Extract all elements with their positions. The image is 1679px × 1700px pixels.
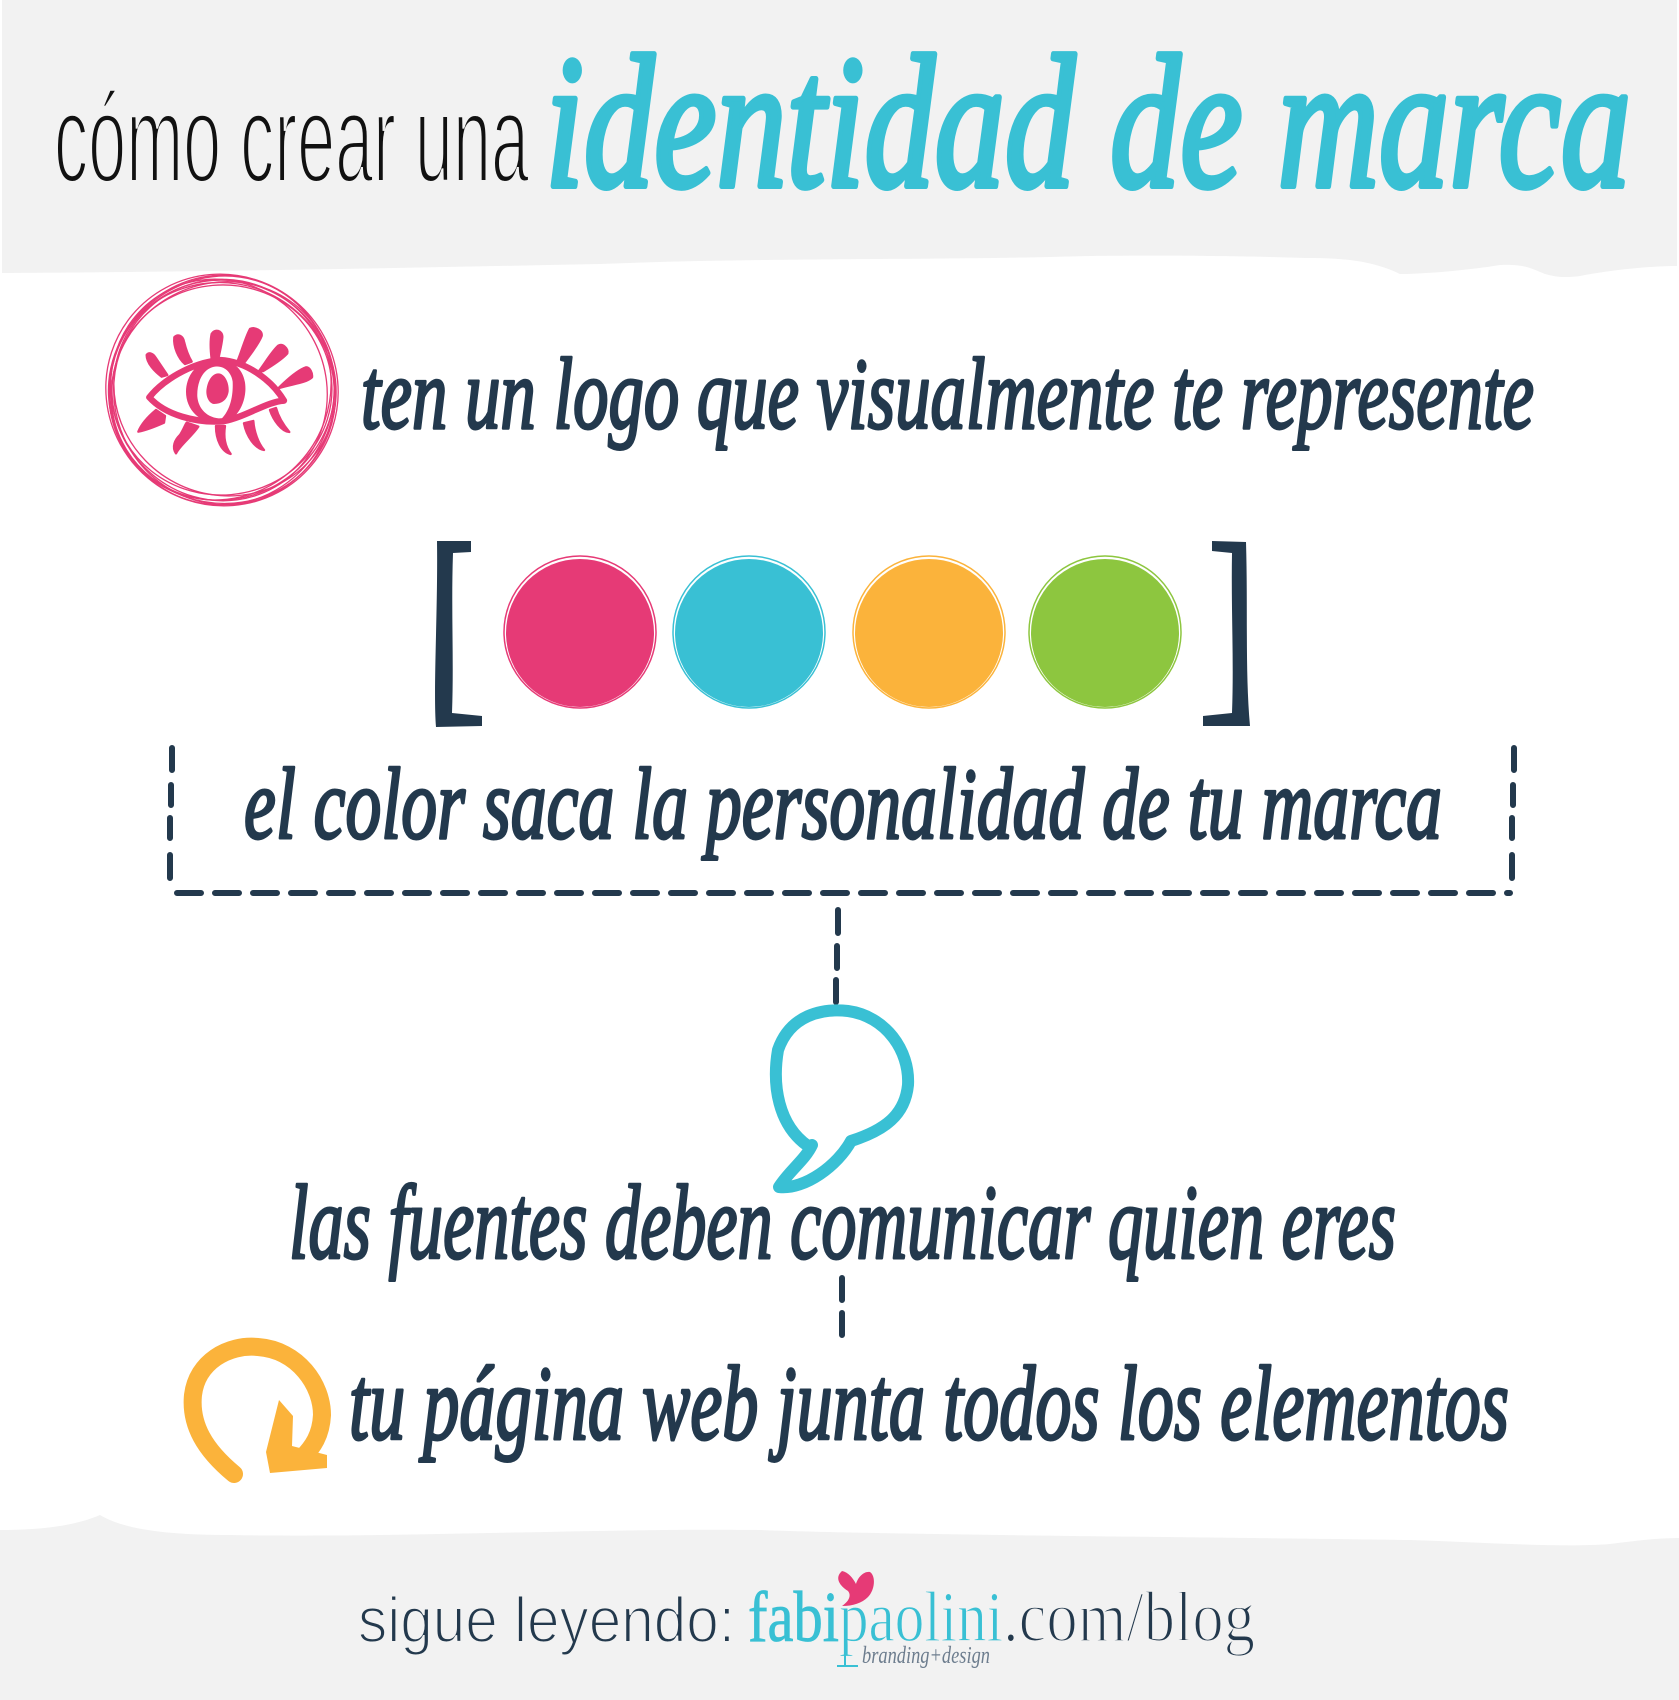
title: light part: cómo crear una xyxy=(54,68,529,209)
dashed connector to web line xyxy=(839,1278,845,1335)
pink swatch xyxy=(504,556,656,708)
dashed connector to speech bubble xyxy=(836,910,838,1002)
arrow stroke xyxy=(193,1347,322,1474)
title xyxy=(54,18,1631,228)
blue swatch xyxy=(673,556,825,708)
green swatch xyxy=(1029,556,1181,708)
icon: heart xyxy=(838,1571,874,1606)
tagline: branding+design xyxy=(862,1643,990,1669)
icon: eye in scribbled circle xyxy=(58,227,386,553)
scribbled circle xyxy=(58,227,386,553)
icon: circular arrow xyxy=(193,1347,327,1474)
icon: speech bubble xyxy=(776,1010,908,1187)
right bracket xyxy=(1203,541,1250,726)
p descender xyxy=(837,1640,858,1666)
colour palette xyxy=(435,541,1250,727)
left bracket xyxy=(435,541,482,727)
dashed frame xyxy=(170,748,1514,893)
arrow head xyxy=(266,1400,327,1473)
footer lead-in: sigue leyendo: xyxy=(358,1584,735,1656)
eye drawing xyxy=(138,328,312,454)
orange swatch xyxy=(853,556,1005,708)
footer link xyxy=(358,1571,1255,1669)
brand: fabi: fabi xyxy=(748,1577,839,1657)
domain and path: .com/blog xyxy=(1003,1577,1255,1657)
footer band xyxy=(0,1515,1679,1700)
brand: paolini: paolini xyxy=(839,1577,1003,1657)
header band xyxy=(0,0,1677,277)
